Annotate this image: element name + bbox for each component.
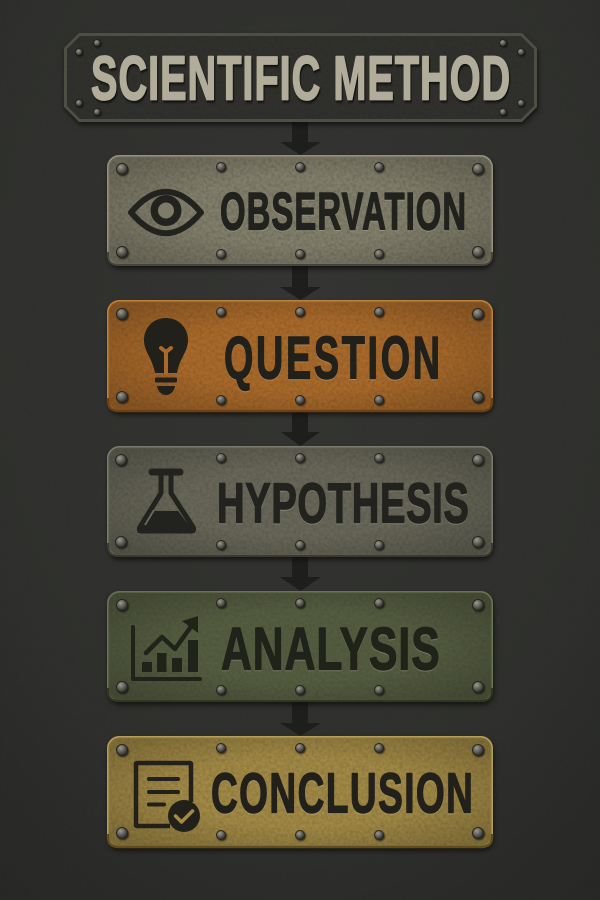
label: Analysis: ANALYSIS	[221, 616, 440, 683]
rivets: hypothesis	[116, 454, 484, 550]
panel: title plate	[64, 33, 537, 122]
icon: document with check	[136, 763, 200, 832]
label: Question: QUESTION	[224, 325, 440, 392]
arrow: hypothesis to analysis	[280, 556, 321, 591]
label: Hypothesis: HYPOTHESIS	[217, 472, 469, 535]
heading: Scientific Method: SCIENTIFIC METHOD	[91, 45, 510, 114]
icon: light bulb	[144, 318, 188, 395]
arrow: observation to question	[280, 265, 321, 300]
icon: line and bar chart	[133, 616, 200, 679]
panel: question	[107, 300, 493, 412]
panel: hypothesis	[107, 446, 493, 557]
rivets: title plate	[76, 40, 524, 115]
panel: conclusion	[107, 736, 493, 848]
arrow: analysis to conclusion	[280, 701, 321, 736]
rivets: observation	[116, 162, 484, 258]
icon: eye	[131, 192, 201, 233]
icon: flask	[137, 472, 195, 533]
panel: analysis	[107, 591, 493, 702]
arrow: title to observation	[280, 121, 321, 155]
rivets: conclusion	[116, 744, 484, 840]
rivets: analysis	[116, 598, 484, 694]
label: Observation: OBSERVATION	[220, 183, 466, 242]
label: Conclusion: CONCLUSION	[211, 762, 473, 826]
arrow: question to hypothesis	[281, 411, 320, 446]
rivets: question	[116, 308, 484, 404]
panel: observation	[107, 155, 493, 266]
